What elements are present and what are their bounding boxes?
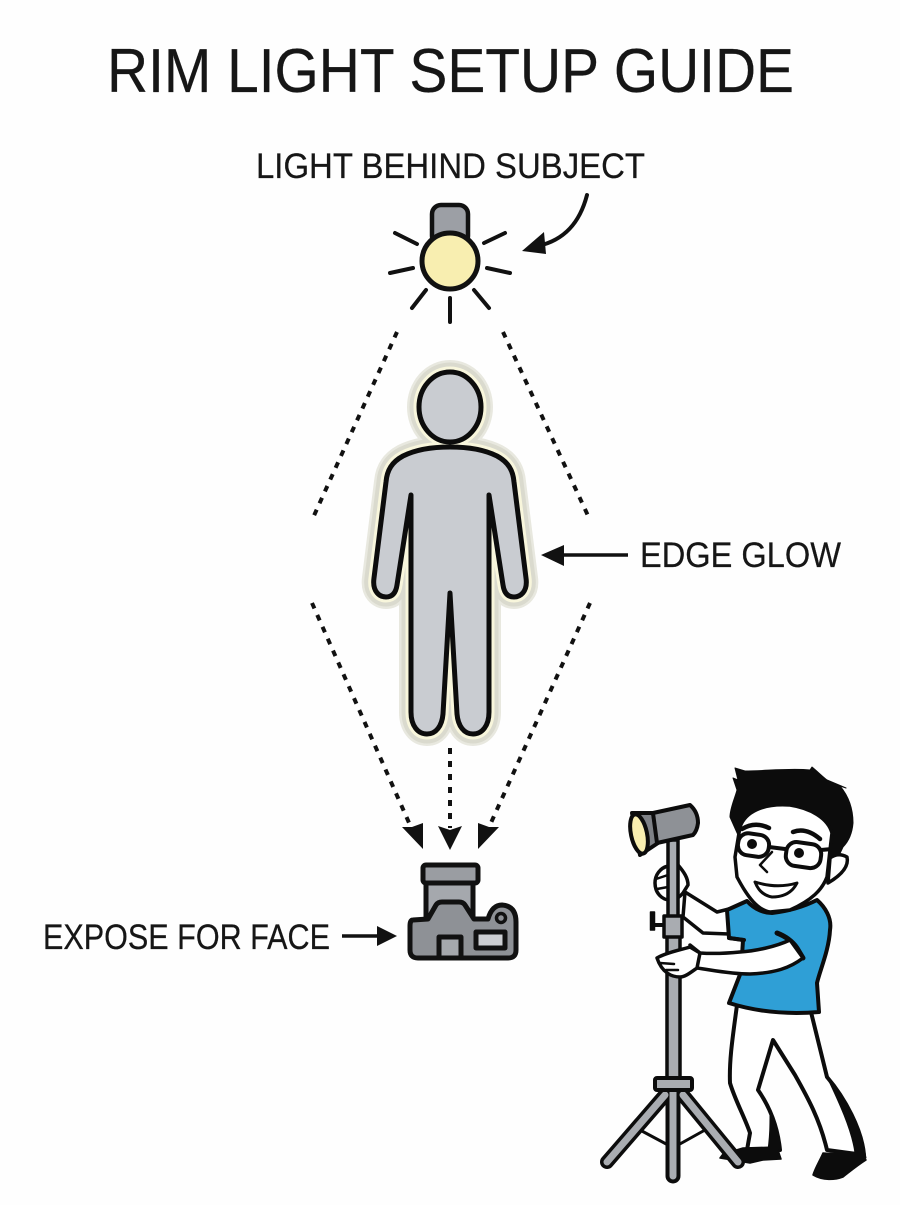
leg shading — [768, 1077, 866, 1158]
figure: subject with edge glow — [374, 372, 526, 734]
lower hand fingers — [660, 963, 678, 970]
upper hand fingers — [656, 875, 668, 889]
sleeve fold — [777, 933, 803, 958]
glasses — [737, 832, 832, 869]
lamp head — [627, 805, 698, 855]
eyebrows — [742, 825, 820, 839]
dashed light paths — [312, 332, 590, 828]
eyes — [747, 839, 804, 858]
arrow: to edge glow — [541, 545, 628, 566]
hair — [730, 767, 853, 864]
legs and trousers — [730, 1005, 864, 1155]
stand pole — [667, 840, 680, 1080]
illustration: photographer with light stand — [607, 767, 866, 1179]
label: expose for face: EXPOSE FOR FACE — [43, 918, 330, 957]
arrow: to light — [522, 195, 587, 254]
arrowheads: light into camera — [402, 823, 499, 850]
label: edge glow: EDGE GLOW — [640, 536, 841, 575]
sleeve hem — [729, 938, 744, 940]
stand clamp — [650, 912, 682, 937]
title: RIM LIGHT SETUP GUIDE — [107, 37, 794, 106]
icon: rim light bulb — [390, 205, 510, 322]
face — [735, 805, 832, 912]
shoes — [720, 1147, 866, 1179]
label: light behind subject: LIGHT BEHIND SUBJECT — [256, 147, 645, 186]
ear — [828, 855, 847, 883]
upper hand — [655, 865, 688, 900]
arrow: to camera — [342, 926, 397, 946]
icon: camera — [410, 865, 516, 958]
nose — [760, 852, 772, 872]
tripod — [607, 1078, 738, 1176]
shirt — [727, 900, 830, 1013]
upper arm — [683, 892, 729, 934]
mouth — [755, 882, 797, 897]
lower arm — [690, 940, 803, 974]
lower hand — [657, 947, 700, 977]
